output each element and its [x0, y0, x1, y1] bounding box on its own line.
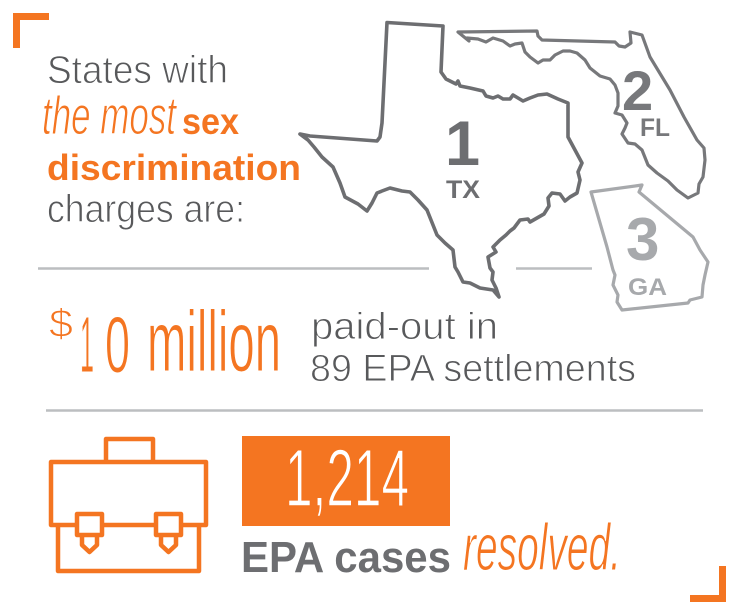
map: Texas: [300, 22, 582, 297]
corner bracket: top left: [16, 16, 49, 48]
number: rank 3: 3: [626, 206, 659, 273]
map: Florida: [458, 31, 705, 198]
heading: states with the most sex discrimination charges: [42, 49, 301, 231]
map: Georgia: [591, 185, 708, 310]
text: paid-out in 89 EPA settlements: 89 EPA settlements: [310, 348, 636, 390]
stat: 10 million handwritten: 1: [80, 300, 94, 389]
stat box: 1,214: [242, 433, 450, 526]
text: paid-out in 89 EPA settlements: paid-out in: [311, 306, 498, 348]
icon: briefcase: [51, 439, 206, 571]
corner bracket: bottom right: [690, 566, 722, 598]
stat: 10 million handwritten: $: [49, 302, 73, 346]
label: GA: GA: [628, 274, 667, 301]
number: rank 2: 2: [622, 59, 653, 122]
caption: EPA cases resolved: resolved.: [463, 510, 621, 584]
stat: 10 million handwritten: 0: [105, 300, 130, 389]
heading: states with the most sex discrimination charges: the most: [42, 86, 177, 146]
stat: 10 million handwritten: million: [147, 294, 281, 390]
label: TX: TX: [446, 176, 480, 204]
caption: EPA cases resolved: EPA cases: [241, 533, 451, 582]
stat: 10 million handwritten: [49, 294, 281, 390]
heading: states with the most sex discrimination charges: charges are:: [47, 188, 245, 231]
heading: states with the most sex discrimination charges: States with: [47, 49, 228, 92]
number: rank 1: 1: [445, 109, 480, 179]
text: paid-out in 89 EPA settlements: [310, 306, 636, 390]
caption: EPA cases resolved: [241, 510, 621, 584]
dividers: [38, 268, 703, 410]
stat box: 1,214: 1,214: [285, 433, 409, 524]
heading: states with the most sex discrimination charges: sex: [182, 101, 239, 142]
label: FL: FL: [640, 114, 670, 142]
heading: states with the most sex discrimination charges: discrimination: [47, 147, 301, 188]
